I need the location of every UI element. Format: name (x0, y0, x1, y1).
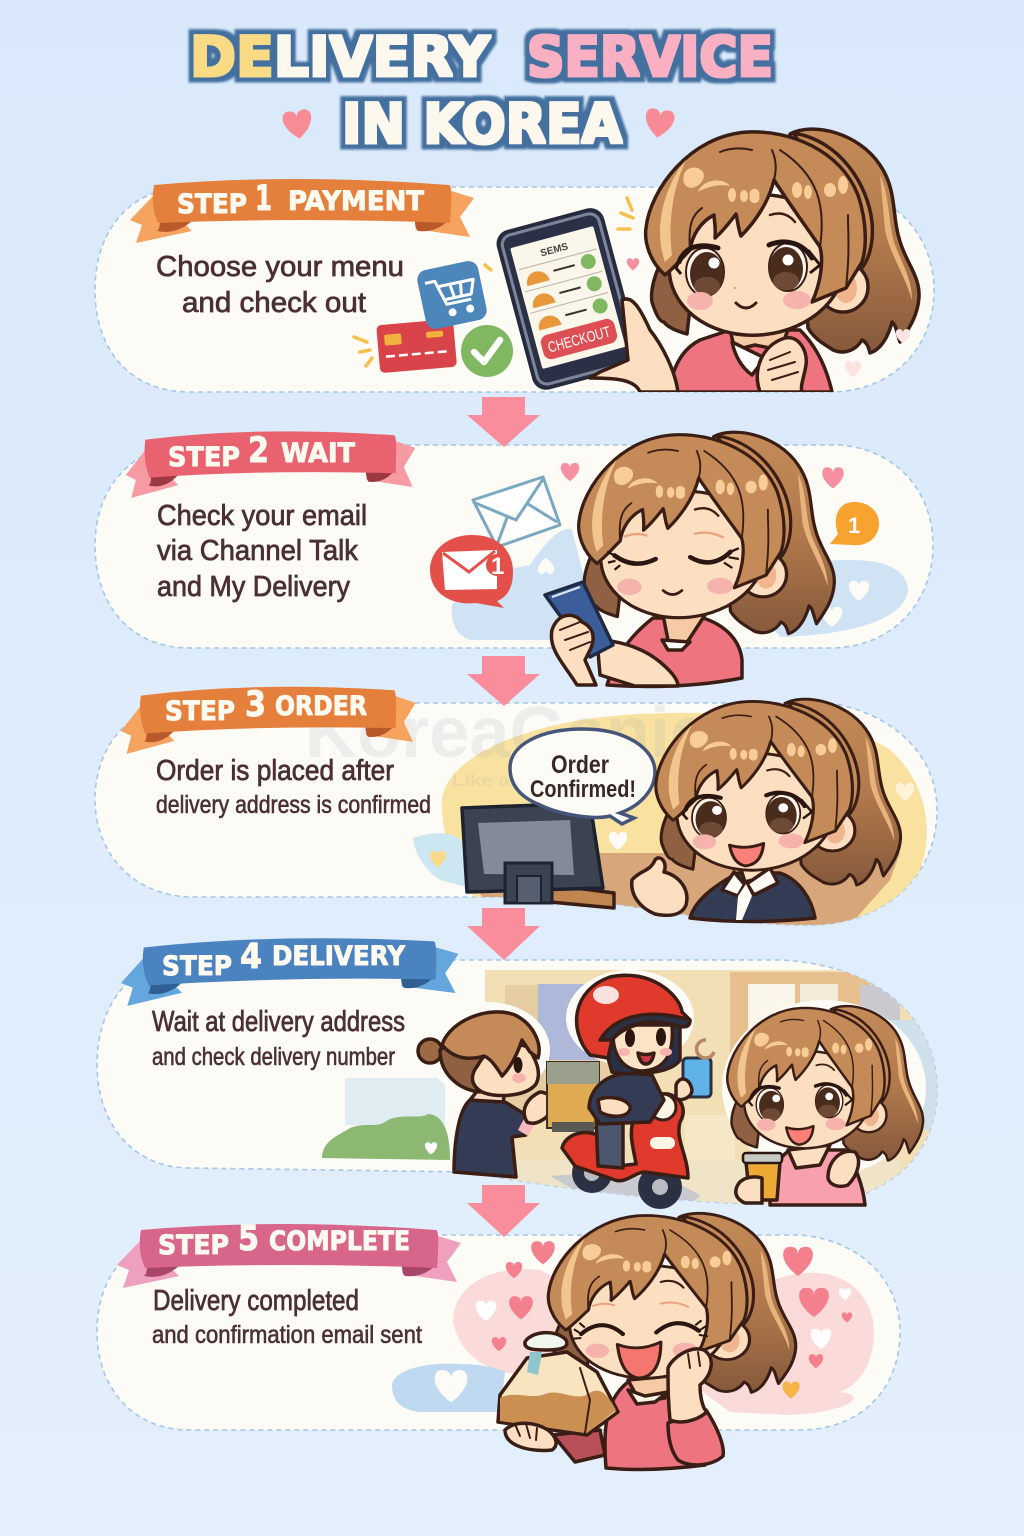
back hair (440, 1030, 500, 1092)
infographic canvas (94, 26, 938, 1472)
bun (418, 1039, 442, 1063)
right sleeve (668, 1410, 723, 1465)
icon: right title heart (643, 107, 675, 139)
text: step 1 description: Choose your menu (156, 251, 404, 283)
scene: step 2 backdrop (452, 529, 908, 640)
right hand (597, 640, 678, 686)
rider jacket (589, 1073, 664, 1124)
arrow: step 1 to 2 (467, 397, 540, 447)
icon: green check (461, 325, 513, 377)
text: step 5 description: and confirmation email sent (152, 1321, 422, 1349)
parcel knot (525, 1333, 567, 1350)
pointing hand (632, 858, 687, 915)
ribbon label: STEP (177, 189, 247, 220)
text: step 4 description (152, 1006, 405, 1071)
callout: order confirmed: Confirmed! (530, 776, 636, 803)
icon: POS monitor (462, 803, 614, 908)
panel: step 1 background (95, 187, 934, 392)
parcel bag (498, 1333, 618, 1435)
step name: WAIT (281, 438, 356, 469)
text: step 1 description (156, 251, 404, 319)
watermark: KoreaGenie (305, 693, 710, 773)
arrow: step 4 to 5 (467, 1185, 540, 1237)
notification count: 1 (491, 553, 504, 580)
step number: 2 (248, 431, 269, 471)
back wheel (572, 1153, 612, 1193)
text: step 3 description: delivery address is confirmed (156, 791, 431, 819)
raised hand (828, 1151, 859, 1186)
ribbon label: STEP (165, 696, 235, 727)
bubble count: 1 (848, 513, 860, 538)
cup hand (736, 1177, 762, 1203)
shirt (605, 1382, 705, 1469)
bushes (322, 1114, 450, 1160)
shirt (669, 330, 832, 392)
sticker halo (722, 1000, 926, 1176)
panel: step 2 background (95, 445, 933, 648)
text: step 3 description: Order is placed after (156, 755, 394, 787)
shirt (607, 618, 742, 686)
title line: in korea: IN KOREA (342, 92, 622, 156)
phone button label: CHECKOUT (546, 324, 612, 357)
ribbon: step 3 order (120, 684, 417, 754)
character: customer waiting step 4 (418, 1012, 554, 1177)
phone (545, 582, 613, 657)
ribbon label: STEP (162, 951, 232, 982)
callout: order confirmed (510, 729, 655, 824)
scene: step 4 street backdrop (322, 970, 937, 1210)
scene: step 3 backdrop (413, 713, 927, 925)
icon: shopping cart tile (415, 259, 489, 331)
left hand (551, 615, 596, 685)
coffee cup (746, 1162, 780, 1200)
step number: 4 (240, 937, 262, 977)
jacket (690, 873, 815, 922)
ribbon label: STEP (158, 1230, 229, 1261)
jacket (454, 1100, 534, 1177)
step number: 5 (238, 1219, 259, 1259)
step name: ORDER (275, 691, 367, 722)
ribbon: step 4 delivery (120, 935, 460, 1006)
text: step 2 description: Check your email (157, 500, 367, 532)
text: step 5 description (152, 1285, 422, 1349)
step name: DELIVERY (272, 941, 405, 972)
scene: step 5 backdrop (392, 1269, 874, 1415)
icon: left title heart (282, 108, 314, 140)
watermark: Like a local (452, 771, 562, 790)
dark sleeve under parcel (553, 1430, 605, 1462)
character: staff girl step 3 (632, 699, 901, 922)
icon: phone with checkout screen: SEMS (539, 241, 570, 259)
text: step 2 description: and My Delivery (157, 571, 350, 603)
top hair (442, 1012, 539, 1076)
icon: orange notification bubble (830, 502, 879, 545)
ribbon: step 2 wait (125, 429, 416, 498)
step number: 1 (255, 179, 272, 219)
parcel ribbon (527, 1352, 542, 1375)
character: girl with coffee step 4 (722, 1000, 926, 1205)
icon: credit card (376, 319, 457, 373)
phone (676, 1058, 711, 1100)
step name: COMPLETE (269, 1226, 410, 1257)
rider face (600, 1022, 680, 1074)
ribbon: step 1 payment (130, 179, 474, 243)
shirt (770, 1150, 865, 1205)
step number: 3 (245, 685, 266, 725)
icon: red mail bubble (430, 535, 513, 608)
character: girl with phone step 1 (590, 129, 919, 392)
panel: step 5 background (97, 1235, 900, 1430)
rider hands (598, 1098, 630, 1116)
icon: envelope (473, 477, 560, 547)
text: step 3 description (156, 755, 431, 819)
decorative hearts step 2 (561, 463, 844, 488)
helmet (577, 975, 690, 1058)
delivery box (547, 1062, 599, 1128)
panel: step 3 background (95, 703, 937, 925)
bottom hand (505, 1423, 556, 1450)
text: step 2 description (157, 500, 367, 603)
step name: PAYMENT (288, 186, 425, 217)
character: happy girl with parcel step 5 (498, 1213, 796, 1469)
cheek hand (668, 1349, 711, 1422)
raised hand (757, 338, 806, 392)
title line: delivery: DELIVERY (190, 25, 491, 89)
ribbon label: STEP (168, 442, 240, 473)
text: step 4 description: and check delivery number (152, 1043, 395, 1071)
decorative sparks around icons (354, 198, 633, 366)
arrow: step 3 to 4 (467, 908, 540, 960)
faint building (345, 1078, 445, 1125)
title line: service: SERVICE (527, 25, 773, 89)
panel: step 4 background (97, 960, 937, 1205)
icon: phone with checkout screen (495, 207, 641, 391)
rider legs (596, 1118, 623, 1168)
ribbon: step 5 complete (117, 1219, 461, 1288)
face (472, 1044, 538, 1096)
decorative hearts step 1 (627, 258, 910, 377)
swirl (697, 1040, 714, 1058)
hand (524, 1092, 554, 1123)
callout: order confirmed: Order (551, 751, 609, 779)
character: delivery rider on scooter (547, 975, 714, 1209)
decorative hearts step 5 (492, 1241, 852, 1399)
title (190, 25, 773, 156)
text: step 4 description: Wait at delivery address (152, 1006, 405, 1038)
front wheel (638, 1165, 682, 1209)
halo behind customer and rider (426, 970, 694, 1098)
arrow: step 2 to 3 (467, 656, 540, 706)
phone hand (590, 299, 678, 392)
text: step 2 description: via Channel Talk (157, 535, 358, 567)
character: girl checking phone step 2 (545, 432, 834, 686)
text: step 1 description: and check out (182, 287, 366, 319)
scooter body (562, 1094, 688, 1181)
text: step 5 description: Delivery completed (153, 1285, 359, 1317)
